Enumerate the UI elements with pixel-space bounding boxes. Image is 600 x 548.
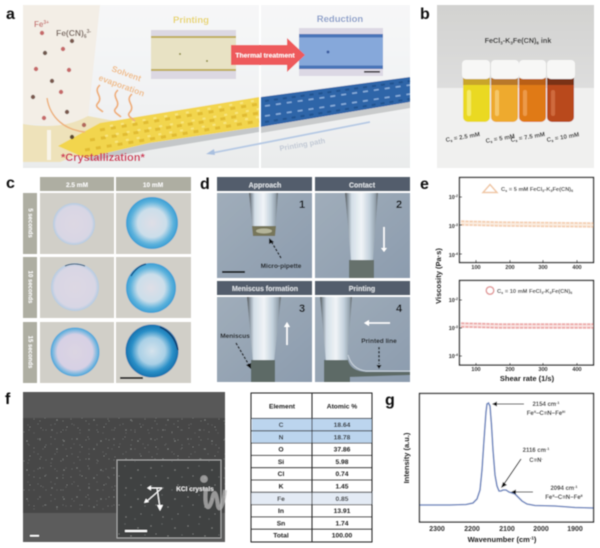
concentration labels: s	[450, 138, 454, 143]
panel g: Raman spectrum	[402, 394, 594, 544]
x axis label: Wavenumber (cm	[468, 535, 530, 544]
photo 2	[315, 193, 410, 278]
SEM inset: KCl crystals	[176, 486, 214, 493]
concentration labels: = 10 mM	[553, 131, 580, 143]
viscosity chart 5 mM: 100	[471, 265, 481, 271]
ink title: FeCl	[485, 36, 500, 45]
ion particles	[31, 31, 86, 139]
droplet 2.5 mM 10 s	[40, 257, 114, 318]
watermark	[200, 475, 225, 508]
photo 3: 3	[299, 303, 305, 315]
inset: reduced film	[299, 28, 383, 76]
row header 5 seconds: 5 seconds	[26, 208, 32, 238]
panel b: vial photograph	[437, 5, 594, 168]
blue crystal line	[261, 77, 410, 133]
table: elemental composition: In	[278, 508, 284, 515]
panel a: printing schematic	[23, 5, 410, 168]
label: Fe(CN)6 3-: 6	[84, 34, 87, 40]
concentration labels: C	[510, 136, 516, 144]
panel g: Raman spectrum: 2100	[499, 526, 515, 533]
concentration labels: = 7.5 mM	[517, 131, 546, 143]
table: elemental composition: 0.74	[335, 471, 349, 478]
ink title: 3	[500, 40, 503, 46]
viscosity chart 5 mM: -2	[455, 194, 458, 198]
panel e: viscosity charts	[434, 178, 594, 383]
yellow crystal line	[58, 97, 259, 161]
concentration labels: C	[546, 136, 552, 144]
crystallization label: *Crystallization*	[61, 152, 145, 164]
ink title: -K	[503, 36, 511, 45]
label: printing path: Printing path	[279, 136, 326, 153]
viscosity chart 10 mM: -K	[543, 289, 550, 295]
viscosity chart 5 mM: s	[505, 189, 507, 193]
viscosity chart 10 mM: 3	[541, 291, 543, 295]
table: elemental composition: Sn	[277, 520, 285, 527]
viscosity chart 5 mM: 400	[572, 265, 582, 271]
peak annotation 2116: -	[541, 457, 543, 461]
table: elemental composition: O	[278, 447, 284, 454]
row header 15 seconds: 15 seconds	[26, 336, 32, 369]
arrow: thermal treatment	[231, 38, 305, 72]
viscosity chart 5 mM: Fe(CN)	[552, 187, 571, 193]
y axis label: Viscosity (Pa·s)	[434, 248, 443, 304]
x axis label: Shear rate (1/s)	[500, 374, 555, 383]
table: elemental composition: 13.91	[334, 508, 351, 515]
x axis label: -1	[530, 536, 534, 540]
viscosity chart 10 mM: 6	[570, 291, 572, 295]
row header 15 seconds	[23, 322, 37, 383]
droplet 10 mM 10 s	[116, 257, 191, 318]
vial 4	[547, 60, 575, 122]
viscosity chart 10 mM: s	[501, 291, 503, 295]
curved flow arrow	[47, 98, 85, 132]
droplet 10 mM 15 s	[116, 322, 191, 383]
panel f: SEM image	[23, 392, 225, 542]
photo 4: Printed line	[361, 338, 397, 345]
heading: Printing: Printing	[173, 15, 209, 26]
peak annotation 2154: -1	[556, 401, 560, 405]
scale bar	[120, 377, 143, 379]
header Contact	[315, 177, 410, 191]
table: elemental composition: 0.85	[335, 496, 349, 503]
viscosity chart 10 mM: 3	[549, 291, 552, 295]
peak annotation 2094: II	[552, 494, 554, 498]
ink title: 6	[536, 40, 539, 46]
viscosity chart 10 mM: 100	[471, 367, 481, 373]
header Printing: Printing	[349, 286, 375, 293]
peak annotation 2116: -1	[546, 447, 549, 451]
row header 10 seconds: 10 seconds	[26, 271, 32, 304]
peak annotation 2094: Fe	[545, 495, 552, 501]
table: elemental composition: K	[279, 484, 284, 490]
viscosity chart 10 mM: Fe(CN)	[552, 289, 570, 295]
panel label c: c	[6, 175, 15, 192]
panel g: Raman spectrum: 1900	[567, 526, 583, 533]
panel g: Raman spectrum: 2300	[429, 526, 445, 533]
viscosity chart 10 mM: C	[497, 289, 501, 295]
table: elemental composition: Fe	[277, 496, 285, 503]
table: elemental composition: C	[279, 422, 284, 429]
viscosity chart 10 mM: 10	[449, 326, 455, 332]
viscosity chart 5 mM: -K	[544, 187, 551, 193]
peak annotation 2094	[511, 485, 583, 501]
viscosity chart 10 mM: = 10 mM FeCl	[503, 289, 542, 295]
concentration labels: = 5 mM	[492, 133, 515, 144]
viscosity chart 10 mM: 200	[505, 367, 515, 373]
vial 2	[491, 60, 519, 122]
peak annotation 2154: III	[562, 410, 565, 414]
photo 1: 1	[299, 199, 305, 211]
panel g: Raman spectrum: 2000	[533, 526, 549, 533]
peak annotation 2116	[501, 447, 549, 488]
photo 2: 2	[396, 199, 402, 211]
viscosity chart 5 mM: 3	[550, 189, 552, 193]
peak annotation 2154: Fe	[527, 411, 534, 417]
table: elemental composition: Element	[269, 404, 296, 410]
row header 5 seconds	[23, 193, 37, 254]
droplet 2.5 mM 5 s	[40, 193, 114, 254]
concentration labels: s	[515, 138, 519, 143]
ink meniscus	[23, 116, 130, 162]
table: elemental composition: Cl	[278, 471, 284, 478]
concentration labels: C	[485, 137, 491, 145]
table: elemental composition: 1.74	[335, 520, 349, 527]
inset: printed film	[151, 30, 236, 79]
viscosity chart 5 mM: 10	[449, 224, 455, 230]
viscosity chart 5 mM: 300	[538, 265, 548, 271]
peak annotation 2154	[492, 401, 565, 417]
table: elemental composition: 5.98	[335, 459, 349, 466]
micro-pipette tip	[23, 5, 100, 126]
ink title: ink	[539, 36, 551, 45]
panel label a: a	[6, 6, 15, 23]
header Approach	[217, 177, 312, 191]
heading: Reduction: Reduction	[317, 14, 363, 25]
viscosity chart 5 mM: 3	[542, 189, 544, 193]
photo 4: 4	[396, 303, 403, 315]
viscosity chart 5 mM: 10	[449, 195, 455, 201]
header Printing	[315, 281, 410, 295]
table: elemental composition	[251, 393, 373, 542]
concentration labels: = 2.5 mM	[452, 131, 481, 143]
x axis label: )	[534, 535, 537, 544]
peak annotation 2116: 2116 cm	[523, 448, 546, 454]
viscosity chart 10 mM	[449, 280, 594, 373]
photo 1: Micro-pipette	[261, 263, 302, 270]
ink title: 3	[510, 40, 513, 46]
table: elemental composition: 18.78	[334, 434, 351, 441]
photo 3: Meniscus	[220, 333, 250, 340]
viscosity chart 5 mM	[449, 178, 594, 271]
peak annotation 2154: II	[534, 410, 536, 414]
column header 10 mM	[116, 177, 191, 191]
solvent evaporation label: Solvent	[110, 63, 143, 83]
peak annotation 2154: 2154 cm	[532, 402, 556, 408]
peak annotation 2094: −C≡N−Fe	[554, 495, 581, 501]
panel label b: b	[420, 6, 430, 23]
photo 4	[315, 297, 410, 382]
viscosity chart 10 mM: 300	[538, 367, 548, 373]
concentration labels	[445, 131, 580, 145]
evaporation squiggles	[97, 85, 135, 121]
spectrum curve	[420, 403, 593, 508]
row header 10 seconds	[23, 257, 37, 318]
vial 1	[462, 60, 490, 122]
viscosity chart 5 mM: = 5 mM FeCl	[507, 187, 543, 193]
solvent evaporation label: evaporation	[97, 72, 146, 98]
viscosity chart 5 mM: -4	[455, 252, 458, 256]
panel label f: f	[5, 391, 11, 408]
viscosity chart 10 mM: 10	[449, 354, 455, 360]
panel label d: d	[200, 176, 210, 193]
viscosity chart 5 mM: 6	[571, 189, 573, 193]
panel label e: e	[420, 176, 429, 193]
header Meniscus formation	[217, 281, 312, 295]
table: elemental composition: Total	[273, 533, 289, 540]
panel g: Raman spectrum: 2200	[464, 526, 480, 533]
table: elemental composition: 18.64	[334, 422, 351, 429]
peak annotation 2094: -1	[574, 485, 578, 489]
table: elemental composition: 1.45	[335, 484, 349, 490]
photo 1	[217, 193, 312, 278]
vial 3	[519, 60, 546, 122]
droplet 10 mM 5 s	[116, 193, 191, 254]
y axis label: Intensity (a.u.)	[402, 432, 411, 483]
concentration labels: s	[490, 139, 494, 144]
viscosity chart 10 mM: -4	[455, 353, 458, 357]
viscosity chart 5 mM: 10	[449, 253, 455, 259]
viscosity chart 10 mM: -3	[455, 325, 458, 329]
SEM inset	[117, 460, 221, 538]
table: elemental composition: Atomic %	[327, 404, 357, 410]
peak annotation 2154: −C≡N−Fe	[536, 411, 563, 417]
concentration labels: s	[551, 138, 555, 143]
viscosity chart 10 mM: 10	[449, 298, 455, 304]
concentration labels: C	[445, 136, 451, 144]
label: Fe3+: 3+	[43, 20, 49, 26]
viscosity chart 5 mM: -3	[455, 223, 458, 227]
ink title: Fe(CN)	[513, 36, 537, 45]
viscosity chart 10 mM: -2	[455, 297, 458, 301]
column header 2.5 mM: 2.5 mM	[66, 182, 88, 189]
arrow: printing path	[206, 122, 370, 155]
header Contact: Contact	[349, 182, 376, 190]
peak annotation 2094: II	[581, 494, 583, 498]
column header 10 mM: 10 mM	[143, 182, 163, 189]
label: Fe(CN)6 3-: 3-	[87, 29, 91, 35]
photo 3	[217, 297, 312, 382]
arrow: thermal treatment: Thermal treatment	[235, 52, 295, 60]
panel c: droplet grid	[23, 177, 191, 383]
column header 2.5 mM	[40, 177, 114, 191]
label: Fe3+: Fe	[34, 20, 43, 29]
peak annotation 2094: 2094 cm	[550, 486, 574, 492]
viscosity chart 10 mM: 400	[572, 367, 582, 373]
droplet 2.5 mM 15 s	[40, 322, 114, 383]
label: Fe(CN)6 3-: Fe(CN)	[56, 28, 84, 38]
viscosity chart 5 mM: 200	[505, 265, 515, 271]
table: elemental composition: 100.00	[332, 533, 353, 540]
table: elemental composition: Si	[278, 459, 284, 466]
table: elemental composition: N	[279, 434, 284, 441]
panel label g: g	[385, 392, 395, 409]
viscosity chart 5 mM: C	[501, 187, 505, 193]
header Approach: Approach	[249, 182, 281, 190]
header Meniscus formation: Meniscus formation	[232, 286, 298, 293]
peak annotation 2116: C≡N	[529, 458, 541, 464]
panel d: meniscus printing photos	[217, 177, 410, 382]
table: elemental composition: 37.86	[334, 447, 351, 454]
